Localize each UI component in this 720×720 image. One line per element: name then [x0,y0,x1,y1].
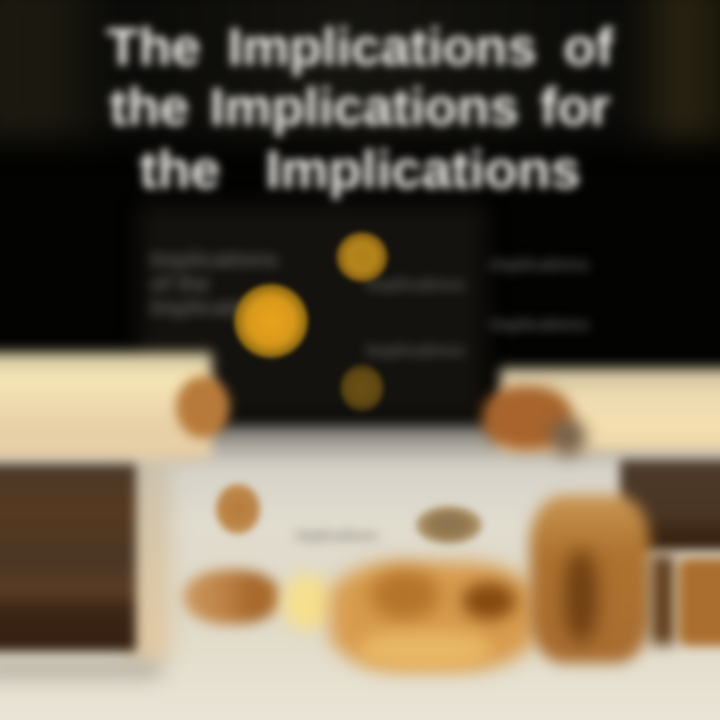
cookie shadow end [550,418,586,456]
cookie: bright crumbs [360,632,490,668]
background: lower white table [0,425,720,720]
right book stack [472,358,720,558]
glow: yellow light [282,574,332,630]
title: the Implications for [110,78,610,137]
dark brown book [620,460,720,550]
title: the Implications [139,140,581,200]
cookies: far right [678,558,720,646]
table shadow: bottom left [0,662,160,676]
background: dark top strips [0,0,720,140]
title: The Implications of [107,18,613,77]
panel: dark centre [140,205,485,420]
cream page edge [125,450,170,660]
text block: left: Implications [150,247,278,272]
cookies: centre cluster [330,562,535,670]
cream book [0,352,212,460]
text block: centre: Implications [366,275,465,294]
cookie on book [176,376,230,438]
title [100,18,620,206]
text block: right: Implications [490,255,589,274]
cookie: small top [216,484,260,534]
cookie: dark spot [370,570,440,620]
text block: right [487,255,591,336]
cookie pile [176,479,720,684]
cookies: left cluster [184,570,280,624]
cookie on book [482,386,572,450]
text block: centre [364,275,466,362]
cookies: right tower [530,495,650,663]
cookie: centre hole [462,582,516,620]
icon: gold dot large [234,284,308,358]
icon: gold dot top [336,232,388,282]
caption on card: Implications [296,527,378,543]
text block: left: Implications [150,295,278,320]
cookie: mid [416,506,482,544]
text block: centre: Implications [366,341,465,360]
icon: gold dot bottom [340,364,384,412]
text block: left: of the [150,271,210,296]
cream book [500,368,720,452]
left book stack [0,342,238,666]
cookie: tower shadow [564,550,598,642]
cookies: dark gap [652,555,674,645]
text block: left [146,247,280,322]
dark brown books [0,464,136,652]
text block: right: Implications [490,315,589,334]
